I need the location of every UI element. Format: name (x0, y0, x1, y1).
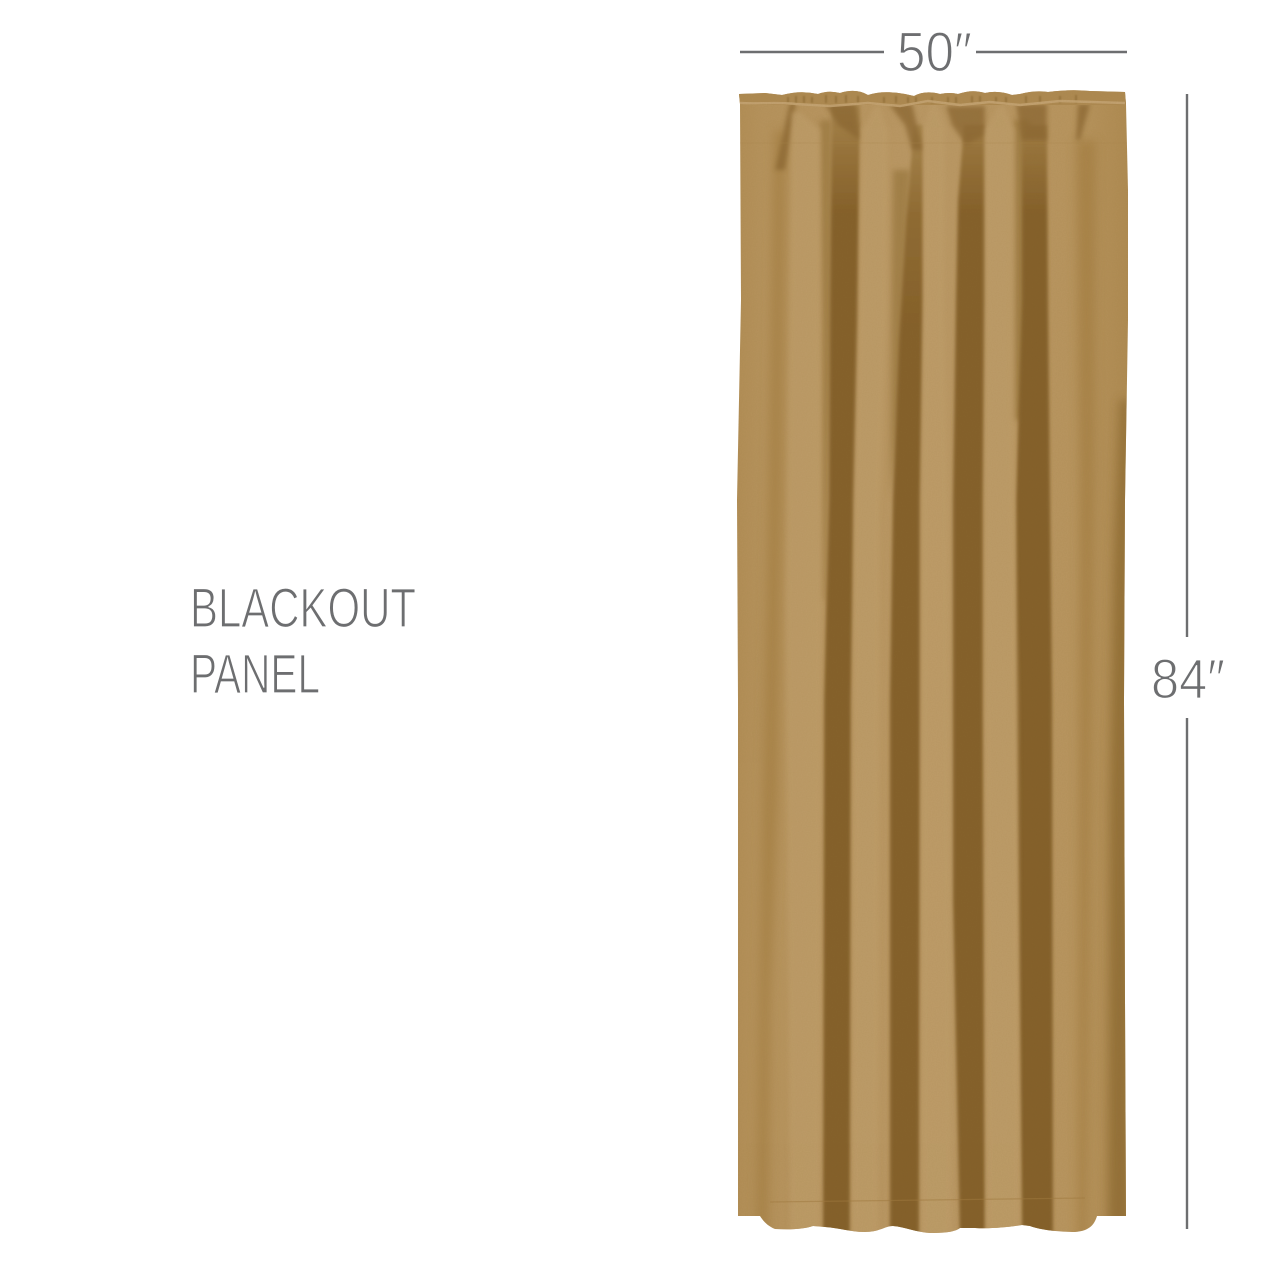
height value: 84″ (1151, 647, 1225, 710)
label line: BLACKOUT: BLACKOUT (190, 576, 416, 639)
bottom hem line (770, 1198, 1085, 1202)
height line top (1186, 94, 1188, 637)
soft side folds (756, 130, 1096, 1240)
soft penumbra beside pleats (820, 120, 1030, 600)
deep pleat shadows (823, 105, 1053, 1240)
curtain panel (730, 85, 1135, 1240)
width line right (976, 51, 1127, 53)
width line left (740, 51, 884, 53)
rod pocket ruffle (735, 88, 1130, 106)
height line bottom (1186, 718, 1188, 1229)
gathered header shadows at the rod pocket (775, 102, 1090, 170)
fabric grain (730, 85, 1135, 1240)
label: blackout panel (190, 576, 416, 705)
fabric base (730, 85, 1135, 1240)
light pleat faces (786, 102, 1020, 1240)
right edge fold (1108, 400, 1130, 1240)
top hem line (740, 142, 1127, 144)
label line: PANEL: PANEL (190, 642, 320, 705)
width value: 50″ (897, 20, 972, 83)
